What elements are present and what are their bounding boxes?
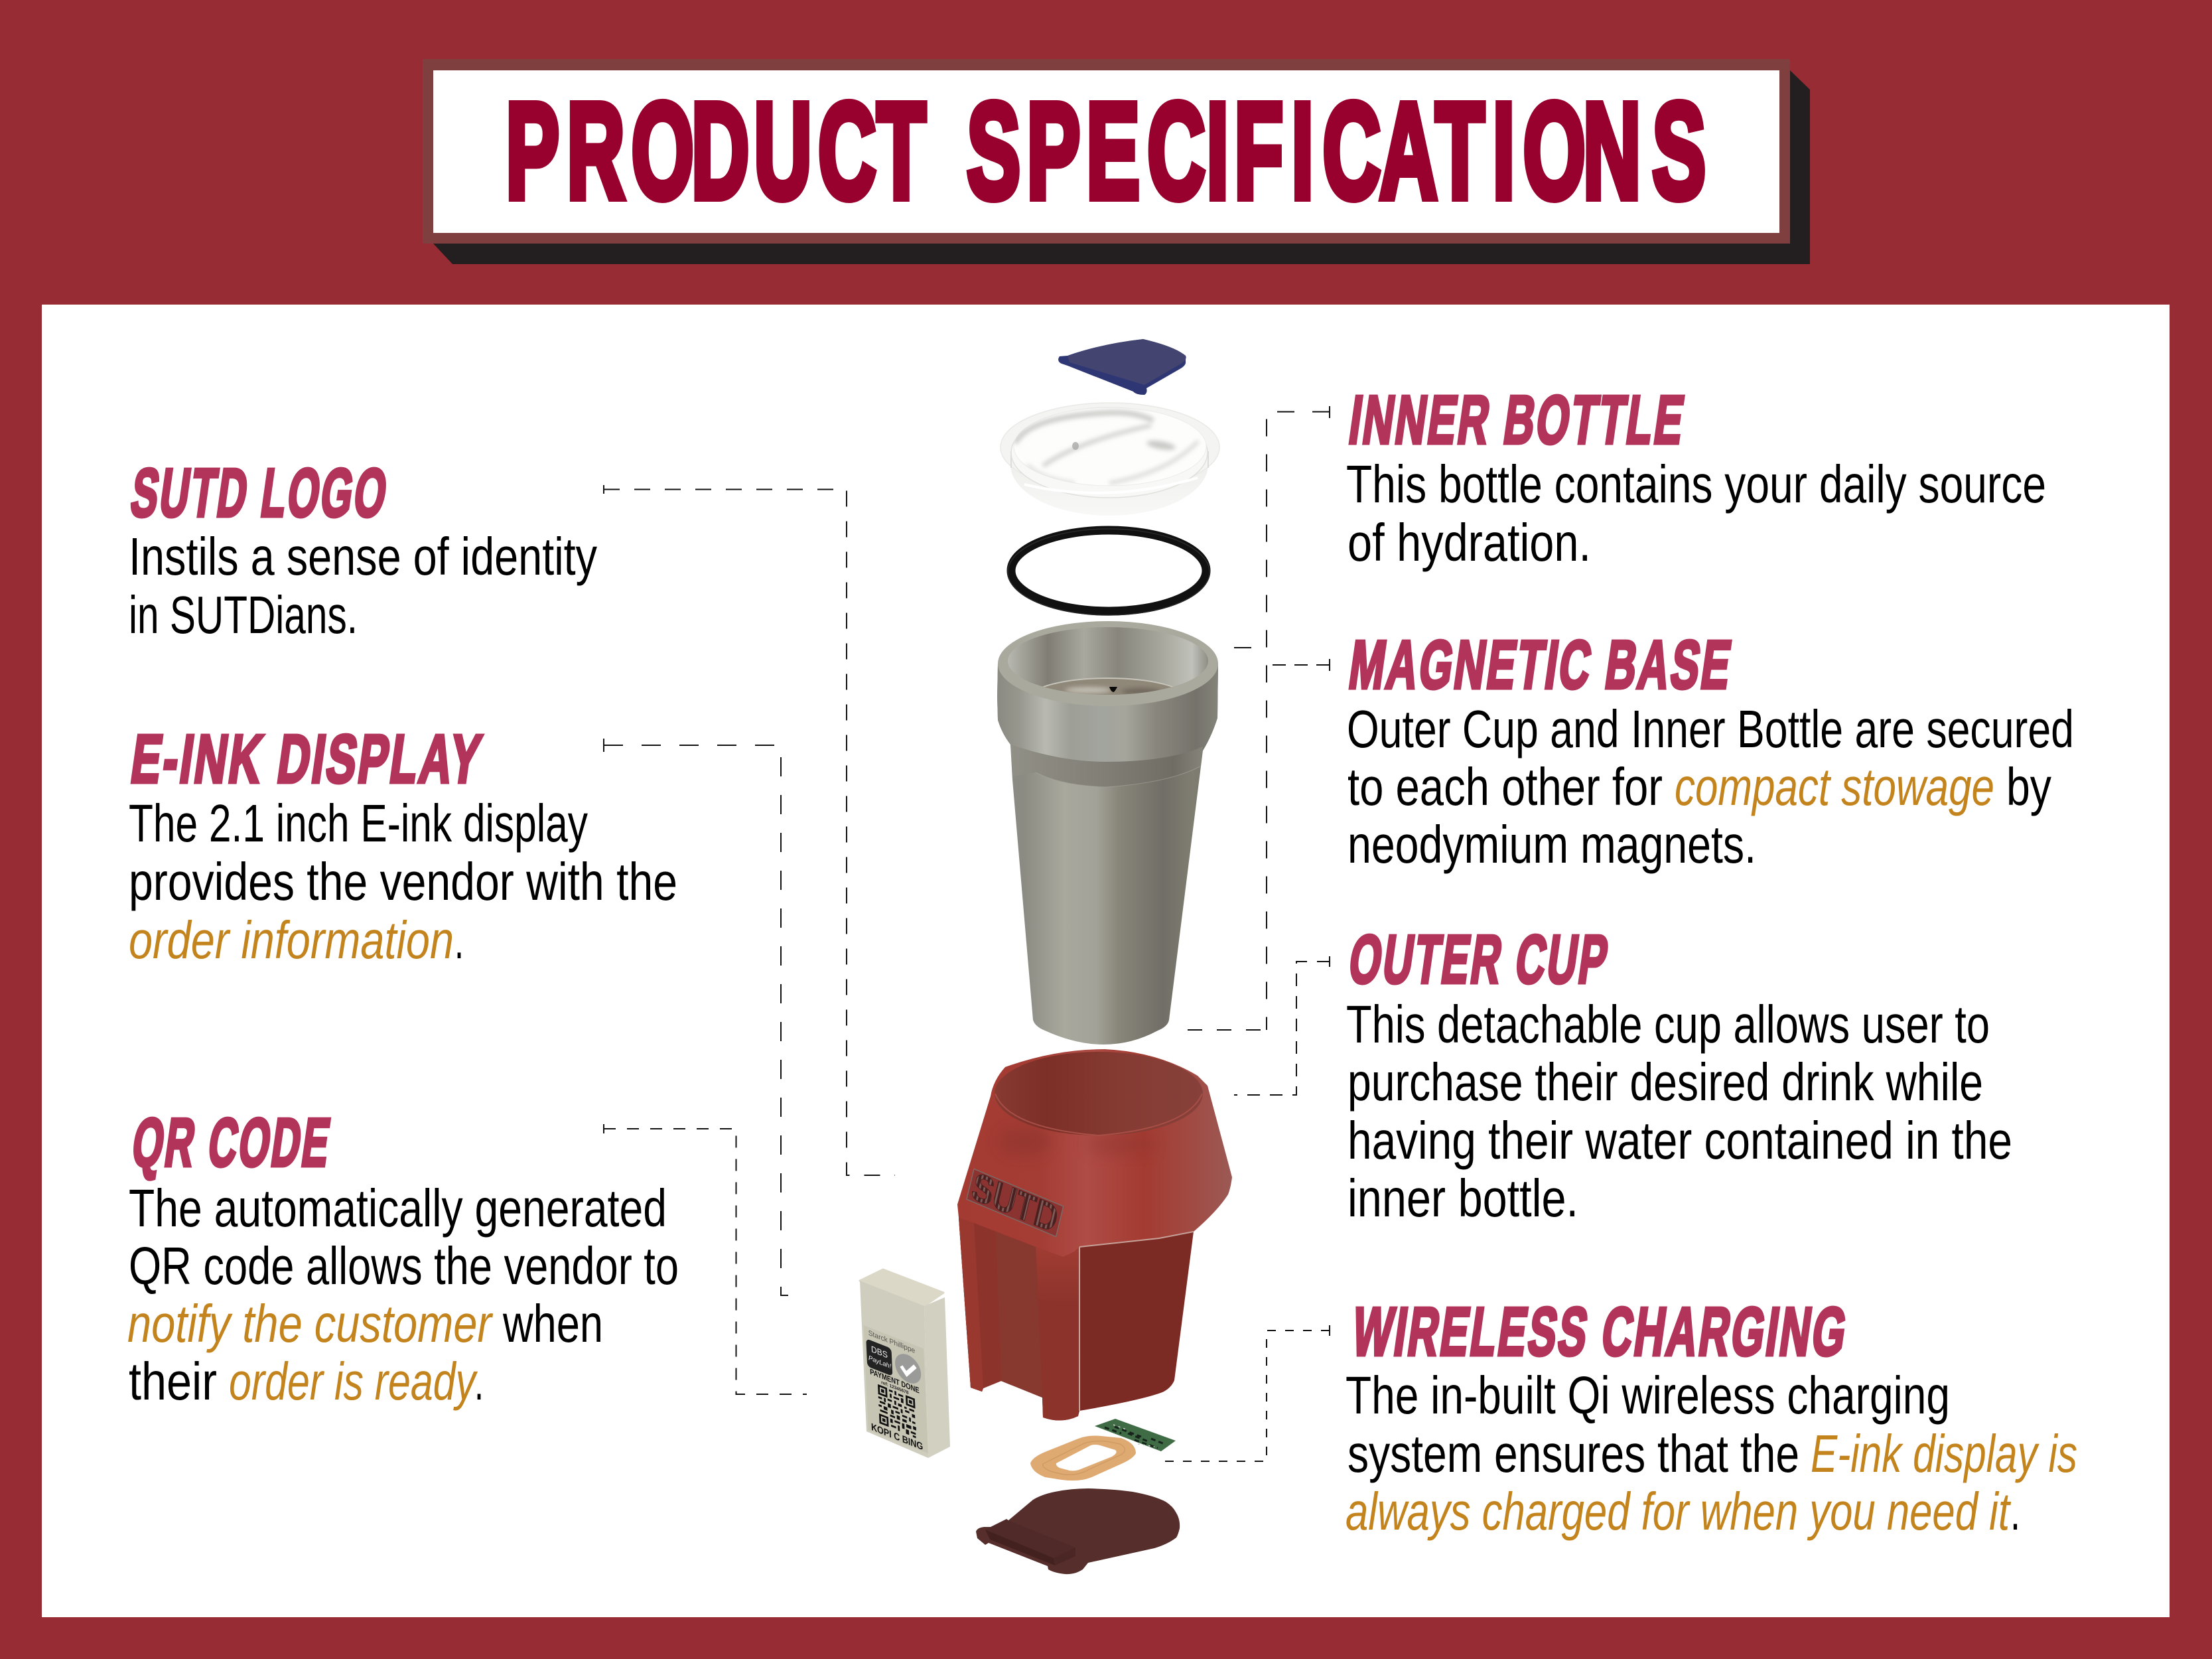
text: QR code description: when: [502, 1294, 603, 1353]
icon: steel inner bottle: [997, 621, 1218, 1045]
text: wireless charging description: E-ink display is: [1811, 1424, 2077, 1483]
heading: INNER BOTTLE: INNER BOTTLE: [1345, 381, 1691, 458]
text: magnetic base description: by: [2006, 757, 2051, 816]
text: outer cup description: inner bottle.: [1348, 1169, 1578, 1228]
callout: outer cup: [1345, 920, 2012, 1228]
text: outer cup description: purchase their desired drink while: [1348, 1052, 1983, 1112]
text: QR code description: .: [474, 1352, 484, 1411]
text: magnetic base description: compact stowage: [1675, 757, 1994, 816]
text: wireless charging description: The in-built Qi wireless charging: [1346, 1366, 1950, 1425]
e-ink screen: DBS: [871, 1344, 888, 1360]
leader line: inner bottle: [1188, 406, 1330, 1030]
text: magnetic base description: neodymium magnets.: [1348, 815, 1756, 874]
e-ink screen: Starck Phillippe: [868, 1329, 915, 1355]
icon: dark base plate: [976, 1488, 1180, 1574]
callout: magnetic base: [1345, 626, 2074, 874]
cup right lower body: [959, 1218, 1194, 1421]
cup left columns: [959, 1218, 1079, 1421]
cup flared collar: [957, 1049, 1232, 1257]
text: SUTD logo description: in SUTDians.: [129, 585, 358, 644]
text: QR code description: notify the customer: [127, 1294, 494, 1353]
text: E-ink display description: provides the vendor with the: [129, 852, 677, 911]
text: wireless charging description: always charged for when you need it: [1346, 1482, 2011, 1541]
text: E-ink display description: order information: [129, 910, 454, 970]
text: magnetic base description: [1347, 699, 2074, 874]
text: SUTD logo description: [129, 527, 597, 644]
text: SUTD logo description: Instils a sense of identity: [129, 527, 597, 586]
heading: WIRELESS CHARGING: WIRELESS CHARGING: [1348, 1293, 1853, 1370]
text: QR code description: QR code allows the vendor to: [129, 1236, 679, 1295]
icon: translucent white lid: [1001, 403, 1219, 516]
icon: black gasket ring: [1008, 529, 1210, 615]
leader line: E-ink display: [604, 739, 788, 1295]
text: outer cup description: This detachable cup allows user to: [1346, 995, 1990, 1054]
text: E-ink display description: [129, 794, 677, 970]
white content panel: [42, 305, 2170, 1617]
text: inner bottle description: of hydration.: [1348, 513, 1591, 572]
text: QR code description: their: [129, 1352, 217, 1411]
title: PRODUCT SPECIFICATIONS: [506, 75, 1706, 227]
leader line: wireless charging: [1156, 1325, 1330, 1461]
title banner: [423, 59, 1810, 264]
e-ink screen: [864, 1325, 928, 1455]
text: wireless charging description: system ensures that the: [1348, 1424, 1799, 1483]
text: outer cup description: [1346, 995, 2012, 1228]
leader line: QR code: [604, 1124, 807, 1394]
text: QR code description: [127, 1179, 679, 1411]
leader line: magnetic base: [1234, 648, 1330, 671]
module front face: [860, 1281, 928, 1458]
text: E-ink display description: The 2.1 inch E-ink display: [129, 794, 588, 853]
e-ink screen: ref: 12345678: [881, 1380, 909, 1396]
heading: QR CODE: QR CODE: [128, 1104, 336, 1181]
text: wireless charging description: .: [2010, 1482, 2020, 1541]
base bar side: [985, 1530, 1055, 1565]
e-ink screen: KOPI C BING: [871, 1421, 924, 1453]
text: magnetic base description: to each other for: [1348, 757, 1663, 816]
icon: red outer cup: [957, 1049, 1232, 1421]
SUTD logo plate: SUTD: [968, 1164, 1062, 1242]
callout: SUTD logo: [127, 454, 597, 644]
base bar top: [985, 1520, 1075, 1558]
e-ink screen: PAYMENT DONE: [870, 1367, 920, 1396]
heading: MAGNETIC BASE: MAGNETIC BASE: [1345, 626, 1738, 703]
cup opening: [995, 1052, 1203, 1135]
cup front recess: [996, 1232, 1042, 1398]
module side face: [924, 1297, 950, 1458]
banner drop shadow: [433, 70, 1810, 264]
leader line: outer cup: [1234, 956, 1330, 1095]
text: inner bottle description: This bottle contains your daily source: [1346, 455, 2046, 514]
text: wireless charging description: [1346, 1366, 2077, 1541]
leader line: SUTD logo: [604, 485, 895, 1175]
text: inner bottle description: [1346, 455, 2046, 572]
banner frame: [423, 59, 1790, 244]
icon: wireless charging circuit board: [1095, 1419, 1176, 1451]
icon: E-ink display module: [860, 1269, 950, 1458]
callout: QR code: [127, 1104, 679, 1411]
heading: E-INK DISPLAY: E-INK DISPLAY: [127, 720, 488, 797]
callout: E-ink display: [127, 720, 677, 970]
callout: inner bottle: [1345, 381, 2046, 572]
banner plate: [433, 70, 1779, 233]
icon: blue lid cap: [1058, 339, 1186, 395]
heading: OUTER CUP: OUTER CUP: [1345, 920, 1614, 997]
text: outer cup description: having their water contained in the: [1348, 1111, 2012, 1170]
icon: copper charging coil: [1030, 1436, 1136, 1480]
text: QR code description: order is ready: [229, 1352, 478, 1411]
e-ink screen: PayLah!: [868, 1354, 892, 1371]
module top face: [860, 1269, 943, 1306]
callout: wireless charging: [1346, 1293, 2077, 1541]
text: QR code description: The automatically generated: [129, 1179, 667, 1238]
text: E-ink display description: .: [454, 910, 464, 970]
QR code: [878, 1384, 916, 1439]
heading: SUTD LOGO: SUTD LOGO: [127, 454, 393, 531]
